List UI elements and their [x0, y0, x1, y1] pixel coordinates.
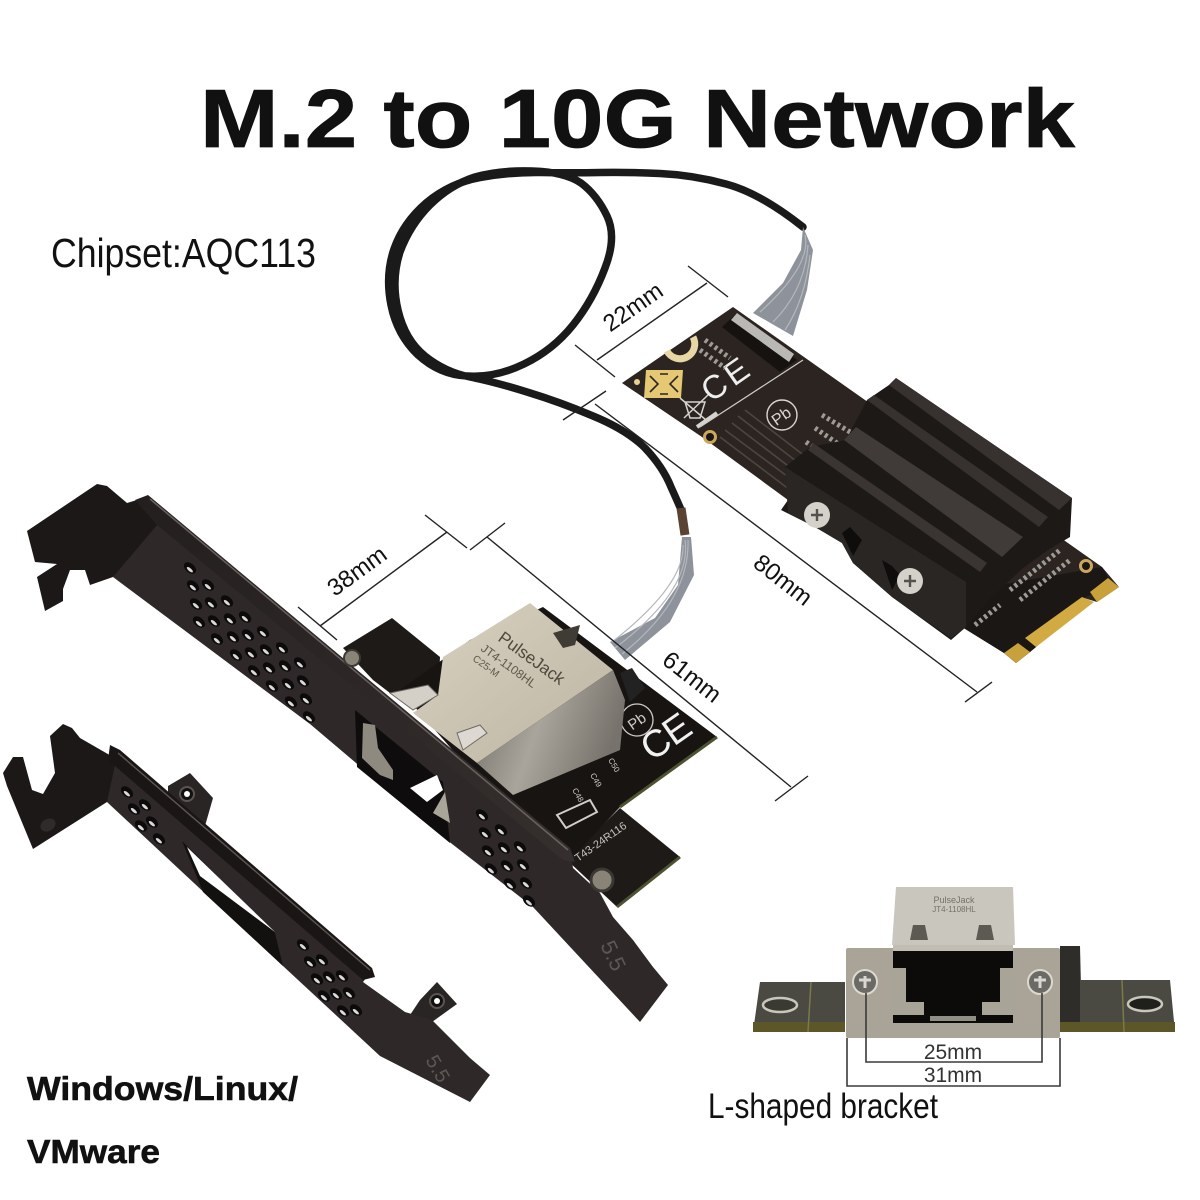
- dimension: 22mm: 22mm: [598, 277, 668, 338]
- card main board: [400, 607, 717, 860]
- dimension: 61mm: [470, 523, 808, 801]
- RJ45 opening: [893, 945, 1013, 1023]
- card CE mark: CE: [633, 705, 700, 769]
- M.2 heatsink: [781, 378, 1072, 640]
- left screw: [344, 650, 360, 666]
- grey wire fan at M.2 connector: [753, 227, 813, 336]
- L-bracket right tab: [1060, 980, 1175, 1032]
- L-shaped bracket caption: L-shaped bracket: [708, 1087, 938, 1126]
- low-profile bracket: [3, 724, 490, 1102]
- right vent holes: [474, 807, 537, 909]
- M.2 end gold ring: [1080, 560, 1092, 572]
- card pcb code: T43-24R116: [573, 820, 629, 864]
- low bracket screw tab: [168, 773, 213, 826]
- M.2 board lower portion: [962, 567, 1112, 663]
- L-bracket jack body: [892, 887, 1015, 945]
- front view of L-shaped bracket: [753, 887, 1175, 1087]
- RJ45 jack housing: [390, 603, 625, 795]
- RJ45 brand text: PulseJack: [495, 628, 569, 689]
- M.2 gold ring: [704, 432, 716, 442]
- low bracket slot: [182, 841, 283, 966]
- M.2 gold fingers: [1004, 578, 1119, 663]
- card upper tab: [343, 618, 440, 695]
- dimension: 25mm: [866, 993, 1042, 1064]
- ear hole: [38, 816, 58, 834]
- tab on far end: [410, 982, 457, 1022]
- bracket stamp: 5.5: [595, 937, 631, 975]
- heatsink fin 1: [808, 443, 987, 572]
- bracket ear: [27, 484, 165, 611]
- card silk labels: C50: [606, 756, 622, 774]
- M.2 recycle icon: [680, 395, 717, 427]
- M.2 cable connector: [722, 313, 797, 372]
- card connector: [620, 668, 645, 702]
- dimension: 80mm: 80mm: [748, 549, 817, 612]
- card silk labels: [570, 756, 622, 804]
- chipset label: Chipset:AQC113: [51, 230, 316, 276]
- M.2 gold mounting notch: [667, 337, 695, 359]
- low bracket stamp: 5.5: [421, 1052, 454, 1087]
- brown cable sleeve: [681, 508, 685, 535]
- low bracket ear: [3, 724, 125, 849]
- heatsink screw 1: [804, 502, 830, 528]
- dimension: 25mm: 25mm: [924, 1041, 982, 1064]
- low bracket vent holes left: [119, 784, 167, 847]
- OS support text: [27, 1070, 298, 1170]
- L-bracket screw right: [1028, 970, 1052, 994]
- L-bracket right board: [1060, 946, 1082, 1030]
- heatsink notches: [842, 527, 900, 590]
- dimension: 80mm: [563, 391, 992, 702]
- rail highlight: [150, 499, 568, 850]
- OS support text: Windows/Linux/: [27, 1070, 298, 1107]
- dimension: 61mm: 61mm: [657, 646, 726, 709]
- dimension: 38mm: 38mm: [322, 541, 392, 602]
- card silk labels: C48: [570, 786, 586, 804]
- M.2 white silk line: [700, 360, 803, 427]
- RJ45 tab lower: [457, 725, 487, 750]
- low bracket plate: [107, 751, 490, 1102]
- grey wire fan at card connector: [610, 537, 694, 660]
- M.2 circuit board: [622, 307, 1119, 663]
- OS support text: VMware: [27, 1133, 160, 1170]
- low bracket vent holes right: [295, 937, 364, 1019]
- M.2 traces: [720, 410, 810, 490]
- card silk labels: C49: [588, 772, 604, 789]
- card olive board edge: [617, 737, 717, 907]
- M.2 Pb mark: Pb: [769, 404, 795, 430]
- card Pb mark: [621, 704, 653, 736]
- card component: [557, 800, 597, 828]
- M.2 silk components: [700, 340, 1070, 625]
- RJ45 top face: [413, 603, 613, 763]
- RJ45 rear latch: [553, 625, 580, 648]
- dimension: 31mm: 31mm: [924, 1064, 982, 1087]
- M.2 gold pad: [644, 370, 683, 398]
- RJ45 model text: JT4-1108HL: [478, 641, 539, 691]
- heatsink screw 2: [897, 568, 923, 594]
- left vent holes: [182, 560, 317, 725]
- bracket screw: [591, 869, 613, 891]
- heatsink base plate: [785, 467, 966, 638]
- heatsink silhouette: [781, 378, 1072, 640]
- PCIe network card: [343, 603, 717, 907]
- L-bracket jack body: PulseJack: [933, 895, 975, 905]
- RJ45 tab upper: [390, 685, 438, 710]
- M.2 gold dot: [634, 379, 640, 385]
- L-bracket screw left: [853, 970, 877, 994]
- dimension: 38mm: [298, 515, 467, 640]
- low rail highlight: [118, 753, 370, 970]
- dimension: 31mm: [847, 1038, 1060, 1087]
- L-bracket left tab: [753, 982, 845, 1032]
- title: M.2 to 10G Network: [200, 72, 1076, 165]
- M.2 card: [622, 307, 1119, 663]
- black twisted cable with loop: [389, 171, 803, 512]
- dimension: 22mm: [575, 266, 728, 377]
- heatsink fin 4: [889, 378, 1072, 510]
- M.2 CE mark: CE: [694, 350, 756, 409]
- card lower tab: [567, 808, 680, 907]
- L-bracket jack body: JT4-1108HL: [932, 905, 976, 914]
- bracket rail: [135, 495, 575, 862]
- L-bracket steel plate: [846, 948, 1060, 1038]
- RJ45 window: [355, 710, 450, 843]
- bracket plate: [113, 497, 668, 1022]
- RJ45 side face: [477, 670, 625, 795]
- low bracket rail: [108, 745, 375, 980]
- RJ45 code text: C25-M: [470, 654, 501, 680]
- full-height bracket: [27, 484, 668, 1022]
- heatsink fin 3: [867, 395, 1048, 527]
- card Pb mark: Pb: [625, 709, 650, 734]
- heatsink fin 2: [844, 427, 1023, 557]
